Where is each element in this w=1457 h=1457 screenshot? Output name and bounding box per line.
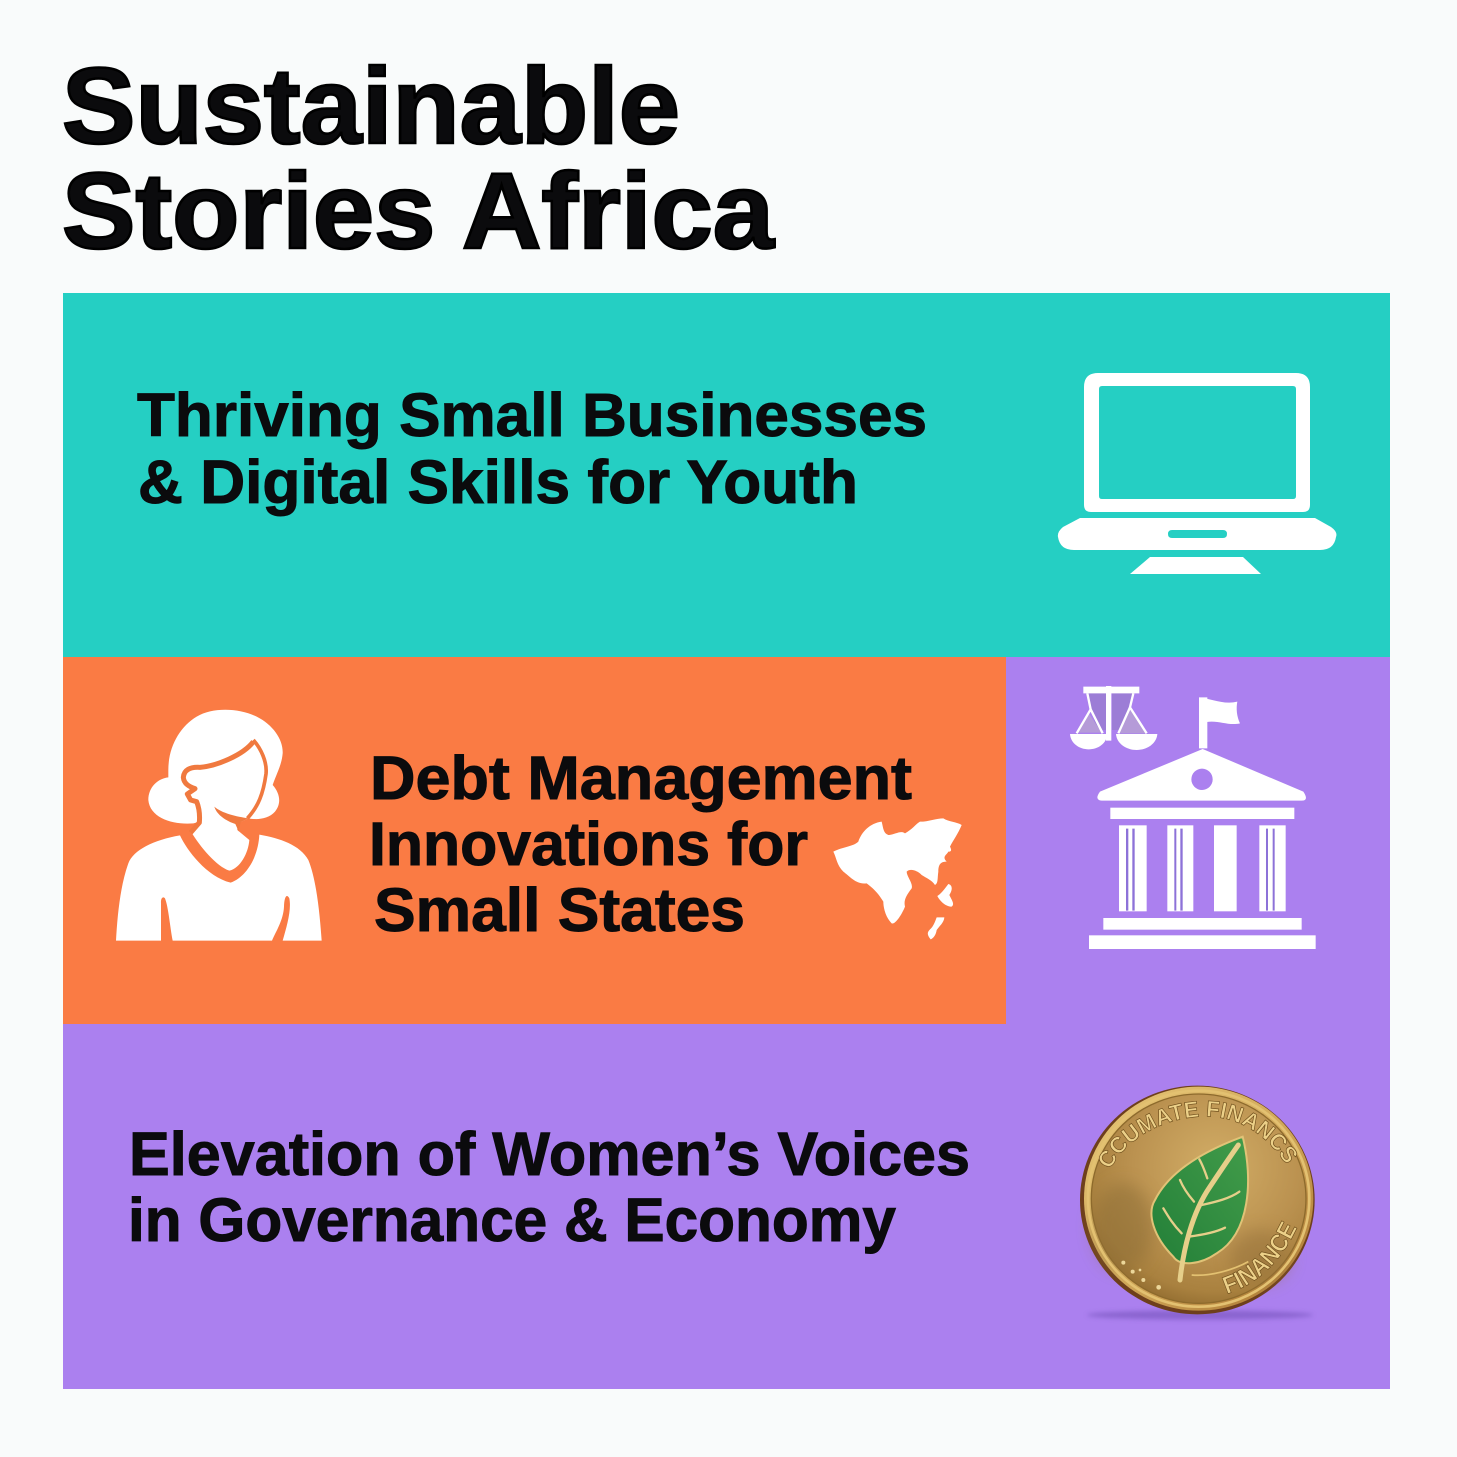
heading: debt management: Debt Management bbox=[370, 744, 912, 812]
title: Stories Africa bbox=[62, 150, 775, 271]
heading: small businesses bbox=[137, 381, 927, 516]
heading: women's voices: Elevation of Women’s Voices bbox=[129, 1120, 970, 1188]
heading: women's voices: in Governance & Economy bbox=[128, 1186, 896, 1254]
icon: woman bbox=[116, 710, 322, 941]
icon: computer bbox=[1058, 373, 1336, 574]
heading: small businesses: Thriving Small Businesses bbox=[137, 381, 927, 449]
leaf emblem bbox=[1151, 1137, 1248, 1280]
panel: governance building bbox=[1006, 657, 1390, 1024]
title: Sustainable bbox=[62, 45, 680, 166]
panel: small businesses and digital skills bbox=[63, 293, 1390, 657]
heading: small businesses: & Digital Skills for Youth bbox=[138, 448, 858, 516]
heading: debt management: Small States bbox=[374, 876, 745, 944]
icon: map of small states bbox=[833, 818, 962, 939]
panel: women's voices bbox=[63, 1024, 1390, 1389]
icon: government building bbox=[1089, 697, 1316, 949]
coin text: bottom: FINANCE bbox=[1222, 1220, 1298, 1294]
coin text: top: CCUMATE FINANCS bbox=[1099, 1100, 1298, 1167]
title bbox=[62, 45, 775, 271]
icon: climate finance coin bbox=[1080, 1086, 1315, 1321]
heading: debt management bbox=[369, 744, 912, 944]
heading: women's voices bbox=[128, 1120, 970, 1254]
heading: debt management: Innovations for bbox=[369, 810, 808, 878]
panel: debt management bbox=[63, 657, 1006, 1024]
icon: scales of justice bbox=[1070, 686, 1157, 750]
